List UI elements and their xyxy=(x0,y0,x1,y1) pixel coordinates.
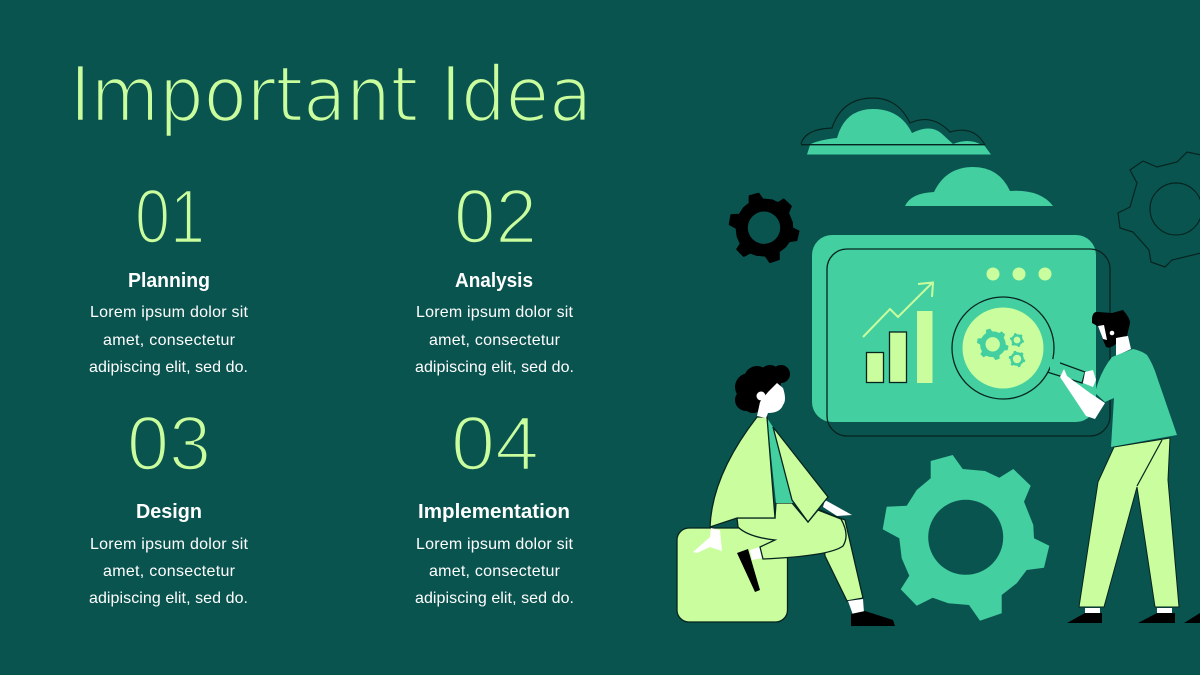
description: analysis: Lorem ipsum dolor sit xyxy=(416,304,574,321)
cloud: lower solid xyxy=(905,167,1053,206)
gear: outline xyxy=(1118,152,1200,267)
item 04: implementation xyxy=(415,401,574,607)
description: planning: adipiscing elit, sed do. xyxy=(89,359,248,376)
description: implementation: amet, consectetur xyxy=(429,563,561,580)
bar chart xyxy=(866,311,932,383)
heading: planning: Planning xyxy=(128,270,210,292)
description: analysis: amet, consectetur xyxy=(429,332,561,349)
description: implementation: Lorem ipsum dolor sit xyxy=(416,536,574,553)
hand on box xyxy=(693,528,722,553)
description: planning: amet, consectetur xyxy=(103,332,236,349)
face and neck xyxy=(757,383,785,418)
title: Important Idea xyxy=(70,51,592,140)
head xyxy=(1092,310,1130,348)
description: analysis: adipiscing elit, sed do. xyxy=(415,359,574,376)
magnifying glass xyxy=(952,297,1085,399)
description: design: amet, consectetur xyxy=(103,563,236,580)
description: implementation xyxy=(415,536,574,607)
neck xyxy=(1116,336,1131,356)
cloud: upper outlined xyxy=(801,98,991,154)
trend arrow xyxy=(863,282,933,337)
shirt xyxy=(767,418,793,503)
head xyxy=(735,365,790,418)
jacket xyxy=(710,417,828,527)
description: planning: Lorem ipsum dolor sit xyxy=(90,304,249,321)
item 01: planning xyxy=(89,174,249,376)
heading: implementation: Implementation xyxy=(418,501,570,523)
arm and hands xyxy=(1060,369,1105,419)
item 03: design xyxy=(89,401,249,607)
socks xyxy=(1085,608,1172,614)
description: design: adipiscing elit, sed do. xyxy=(89,590,248,607)
curly hair xyxy=(735,365,790,413)
near foot xyxy=(737,547,762,592)
gear: black xyxy=(730,194,799,262)
number 04: 04 xyxy=(451,401,539,487)
description: analysis xyxy=(415,304,574,376)
number 01: 01 xyxy=(135,174,205,260)
person: standing xyxy=(1060,310,1200,623)
ear xyxy=(756,392,766,400)
far leg xyxy=(820,510,863,601)
item 02: analysis xyxy=(415,174,574,376)
far sock and shoe xyxy=(848,599,895,626)
hand on knee xyxy=(823,500,852,516)
description: design: Lorem ipsum dolor sit xyxy=(90,536,249,553)
t-shirt xyxy=(1095,349,1177,447)
thigh xyxy=(737,503,846,559)
description: planning xyxy=(89,304,249,376)
heading: design: Design xyxy=(136,501,202,523)
shoes xyxy=(1067,613,1200,623)
number 03: 03 xyxy=(127,401,211,487)
dashboard panel xyxy=(812,235,1110,436)
panel outline xyxy=(827,249,1110,436)
description: implementation: adipiscing elit, sed do. xyxy=(415,590,574,607)
trousers xyxy=(1079,438,1179,607)
three dots xyxy=(986,268,1052,280)
gears in magnifier xyxy=(977,329,1025,367)
person: seated xyxy=(677,365,895,626)
gear: large green xyxy=(883,455,1049,621)
number 02: 02 xyxy=(454,174,537,260)
panel background xyxy=(812,235,1096,422)
description: design xyxy=(89,536,249,607)
heading: analysis: Analysis xyxy=(455,270,533,292)
box seat xyxy=(677,528,788,622)
